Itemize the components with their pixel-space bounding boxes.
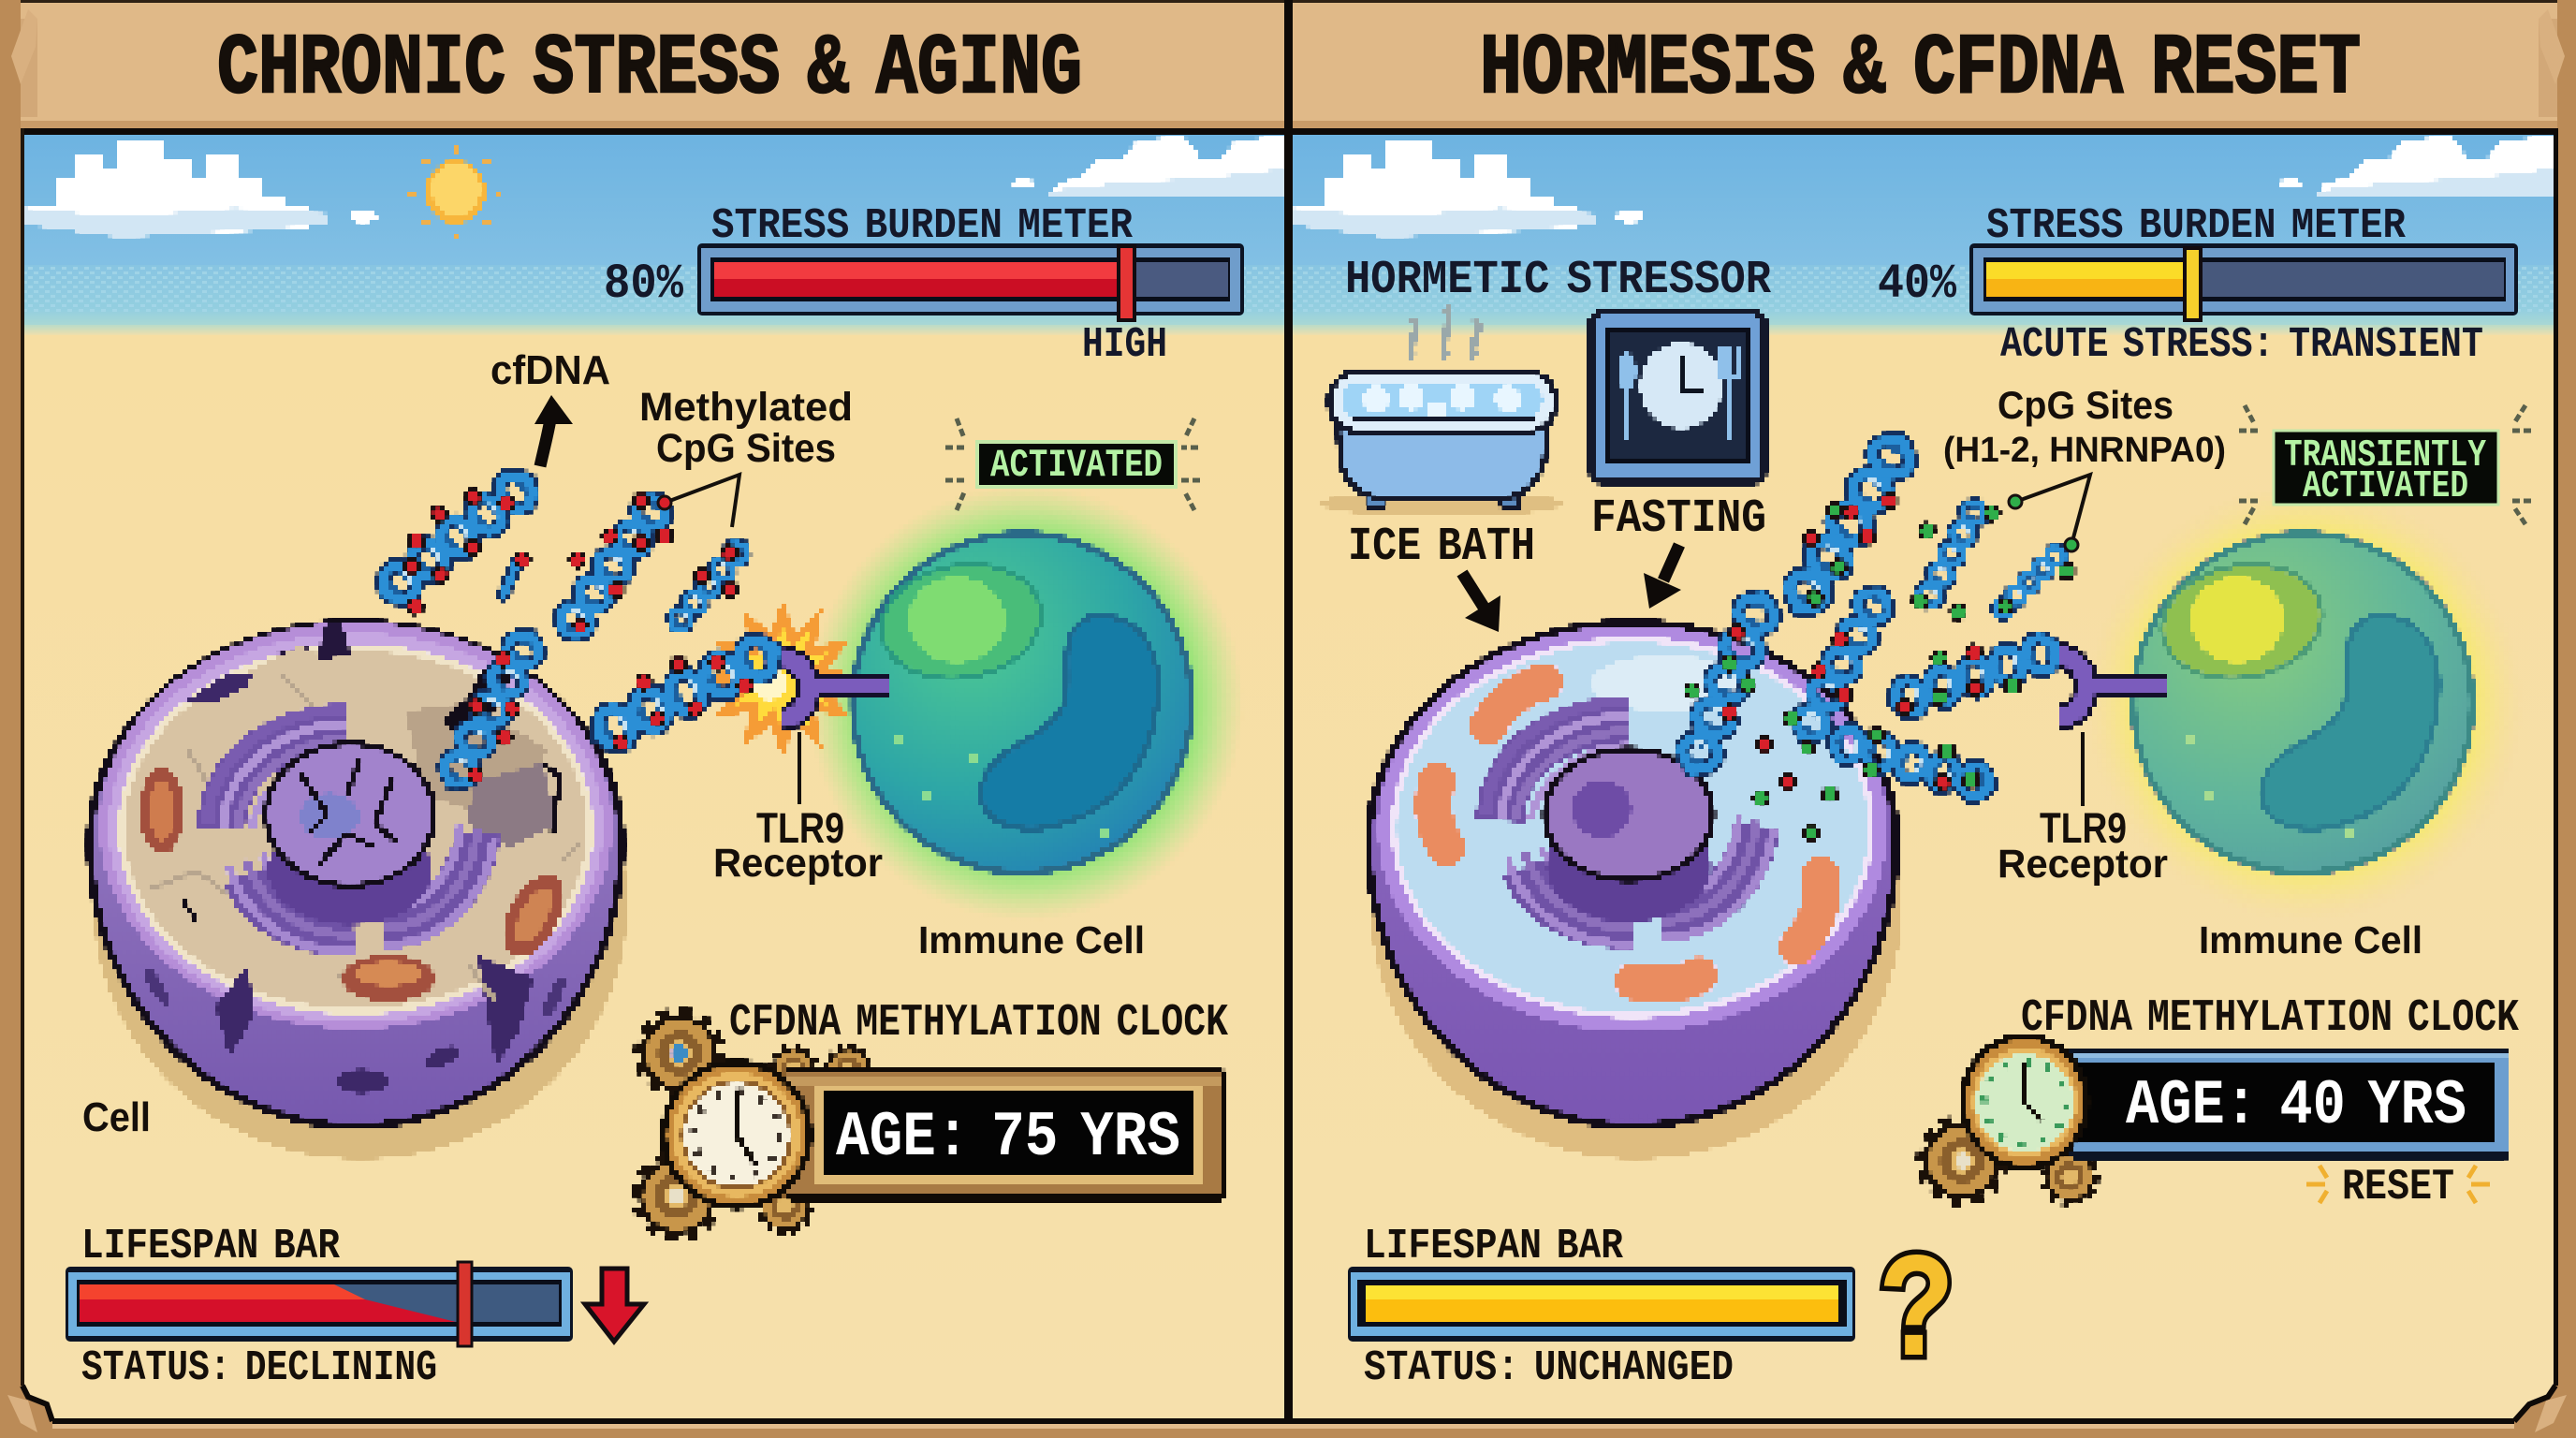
label: TLR9 receptor: TLR9 [756, 804, 844, 852]
cfDNA fragment C [666, 537, 752, 635]
cfDNA fragment B [552, 490, 674, 643]
readout: age 40: AGE: 40 YRS [2126, 1070, 2466, 1142]
left cloud [1292, 140, 1644, 238]
arrow: lifespan decline [585, 1269, 644, 1342]
reset label: RESET [2342, 1163, 2454, 1211]
overlay: leader lines and arrows [534, 395, 799, 804]
clock readout frame [2070, 1047, 2510, 1159]
label: methylated CpG sites [639, 385, 853, 471]
background: sky, sea and sand [1293, 134, 2557, 1421]
background: sky, sea and sand [23, 134, 1284, 1421]
transiently activated badge: TRANSIENTLY [2284, 434, 2486, 477]
label: TLR9 receptor: Receptor [713, 841, 883, 886]
activated badge [945, 418, 1200, 510]
healthy cell [1368, 623, 1902, 1159]
label: cell: Cell [82, 1094, 151, 1140]
stress burden meter [604, 202, 1244, 369]
cfDNA fragment A [374, 466, 541, 614]
header: chronic stress and aging: CHRONIC STRESS & AGING [217, 22, 1082, 118]
label: TLR9 receptor [713, 804, 883, 886]
label: CpG sites: CpG Sites [1998, 383, 2174, 427]
icon: fasting clock and cutlery [1591, 312, 1764, 482]
golgi apparatus [208, 709, 494, 951]
methylation clock gears [637, 1014, 870, 1236]
right cloud [1013, 136, 1287, 198]
lifespan bar declining [66, 1223, 573, 1392]
damaged cell [90, 622, 627, 1159]
short DNA fragment [504, 552, 530, 594]
stress burden meter: STRESS BURDEN METER [1986, 202, 2406, 250]
left cloud [25, 140, 377, 238]
label: fasting: FASTING [1591, 492, 1766, 546]
label: TLR9 receptor [1998, 804, 2168, 887]
lifespan bar declining: STATUS: DECLINING [81, 1344, 437, 1392]
receptor leader [798, 732, 801, 804]
header: hormesis and cfDNA reset: HORMESIS & CFDNA RESET [1480, 22, 2361, 118]
cfDNA fragment leaving cell left [1676, 590, 1780, 777]
CpG site leader [2015, 475, 2090, 545]
cfDNA fragment binding receptor [1888, 633, 2062, 719]
immune cell glow [809, 486, 1243, 920]
activated badge: ACTIVATED [990, 443, 1163, 488]
label: cfDNA: cfDNA [490, 347, 610, 393]
transiently activated badge [2239, 405, 2531, 524]
immune cell glow [2087, 486, 2522, 920]
loose CpG dots [1753, 605, 1966, 840]
stress burden meter: 40% [1878, 257, 1957, 312]
stress burden meter: HIGH [1082, 321, 1167, 369]
panel: hormesis and cfDNA reset [1292, 134, 2557, 1421]
icon: sun [408, 146, 503, 240]
icon: question mark: ? [1880, 1231, 1954, 1401]
label: CpG sites: (H1-2, HNRNPA0) [1943, 431, 2226, 470]
overlay: leader lines and arrows [1462, 475, 2090, 806]
mitochondria [1434, 682, 1822, 985]
label: TLR9 receptor: Receptor [1998, 842, 2168, 887]
cfDNA fragment short [1990, 543, 2074, 622]
lifespan bar unchanged: LIFESPAN BAR [1364, 1223, 1623, 1270]
methylated site leader [665, 475, 739, 527]
cfDNA fragment lower [1828, 725, 1995, 801]
readout: age 75: AGE: 75 YRS [836, 1102, 1180, 1174]
icon: ice bath [1322, 307, 1561, 517]
cfDNA fragment middle [1912, 497, 1999, 611]
transiently activated badge: ACTIVATED [2303, 465, 2468, 508]
label: ice bath: ICE BATH [1348, 521, 1535, 574]
stress burden meter: 80% [604, 257, 684, 312]
cracked nucleus [266, 743, 434, 925]
immune cell [2133, 534, 2472, 873]
cfDNA fragment leaving cell right [1784, 584, 1895, 755]
immune cell [853, 534, 1192, 873]
cfDNA fragment leaving cell [437, 627, 546, 792]
right cloud [2280, 136, 2554, 198]
methylation clock gears [1923, 1122, 2095, 1202]
label: methylated CpG sites: CpG Sites [656, 426, 836, 471]
golgi apparatus [1486, 701, 1773, 944]
artwork layer [25, 136, 1287, 1236]
label: methylated CpG sites: Methylated [639, 385, 853, 430]
cfDNA fragment upper [1781, 431, 1918, 618]
label: immune cell: Immune Cell [2199, 918, 2422, 961]
label: TLR9 receptor: TLR9 [2040, 804, 2127, 852]
nucleus [1544, 749, 1713, 922]
label: immune cell: Immune Cell [918, 918, 1145, 961]
clock readout frame [785, 1067, 1224, 1201]
stress burden meter: STRESS BURDEN METER [711, 202, 1133, 250]
mitochondria [139, 768, 576, 1002]
lifespan bar declining: LIFESPAN BAR [81, 1223, 340, 1270]
cfDNA fragment binding receptor [589, 632, 783, 754]
lifespan bar unchanged: STATUS: UNCHANGED [1364, 1344, 1734, 1392]
arrow: fasting to cell [1644, 545, 1681, 609]
artwork layer [1292, 136, 2554, 1202]
clock face [664, 1063, 810, 1207]
impact burst [703, 599, 862, 758]
label: methylation clock heading: CFDNA METHYLATION CLOCK [729, 998, 1228, 1049]
hormetic stressor heading: HORMETIC STRESSOR [1345, 254, 1771, 307]
panel: chronic stress and aging [23, 134, 1287, 1421]
cfDNA release arrow [534, 395, 573, 466]
clock face [1963, 1036, 2086, 1167]
receptor leader [2081, 732, 2085, 806]
TLR9 receptor [781, 657, 887, 719]
stress burden meter [1878, 202, 2518, 369]
TLR9 receptor [2059, 655, 2168, 717]
stress burden meter: ACUTE STRESS: TRANSIENT [2000, 321, 2483, 369]
arrow: ice bath to cell [1462, 573, 1500, 632]
lifespan bar unchanged [1348, 1223, 1855, 1392]
label: CpG sites [1943, 383, 2226, 470]
